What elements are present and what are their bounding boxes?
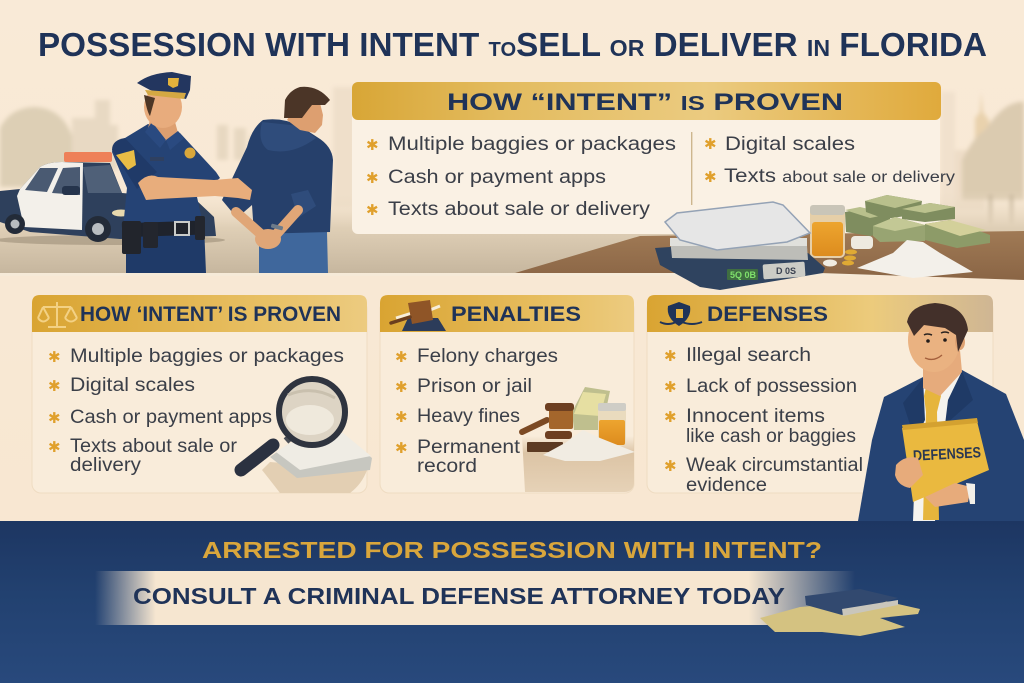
header bar <box>380 295 634 332</box>
panel: how intent is proven: Cash or payment apps <box>70 407 272 428</box>
panel: how intent is proven: Digital scales <box>70 375 195 396</box>
illustration: table with scale, bag, pills, cash and powder: D 0S <box>776 266 796 276</box>
panel: defenses: ✱ <box>664 457 677 475</box>
panel: how intent is proven (top): ✱ <box>366 169 379 187</box>
icon: police car <box>0 152 225 245</box>
panel: penalties: record <box>417 456 477 477</box>
icon: shield <box>660 302 702 326</box>
panel: how intent is proven (top): ✱ <box>366 201 379 219</box>
panel: defenses: evidence <box>686 475 767 496</box>
panel: defenses: Weak circumstantial <box>686 455 863 476</box>
panel: how intent is proven (top): ✱ <box>704 168 717 186</box>
panel: penalties: ✱ <box>395 439 408 457</box>
panel: how intent is proven: ✱ <box>48 377 61 395</box>
panel: how intent is proven (top): Digital scales <box>725 134 855 155</box>
illustration: police officer <box>112 72 252 273</box>
panel: how intent is proven: ✱ <box>48 438 61 456</box>
panel: defenses: Innocent items <box>686 406 825 427</box>
panel: how intent is proven: Texts about sale or <box>70 436 238 457</box>
cta strip <box>95 571 855 625</box>
panel: how intent is proven (top): ✱ <box>704 135 717 153</box>
panel: how intent is proven <box>32 295 372 493</box>
panel: penalties: Permanent <box>417 437 521 458</box>
panel: how intent is proven: ✱ <box>48 348 61 366</box>
folder label: DEFENSES <box>913 444 981 465</box>
illustration: suspect in handcuffs <box>222 87 333 273</box>
panel: how intent is proven (top): Texts about sale or delivery <box>388 199 651 220</box>
icon: magnifying glass over papers <box>241 379 372 493</box>
panel: penalties: PENALTIES <box>451 303 581 326</box>
icon: scales <box>38 302 77 327</box>
panel: how intent is proven: Multiple baggies or packages <box>70 346 344 367</box>
panel: defenses: like cash or baggies <box>686 426 856 447</box>
panel: how intent is proven (top): Multiple baggies or packages <box>388 134 676 155</box>
panel: how intent is proven (top): Cash or payment apps <box>388 167 606 188</box>
panel: how intent is proven (top): ✱ <box>366 136 379 154</box>
panel: how intent is proven: HOW ‘INTENT’ IS PROVEN <box>80 303 341 326</box>
panel: defenses: DEFENSES <box>707 303 828 326</box>
illustration: table with scale, bag, pills, cash and powder <box>515 195 1024 290</box>
panel: how intent is proven: delivery <box>70 455 142 476</box>
panel: penalties: Prison or jail <box>417 376 532 397</box>
illustration: table with scale, bag, pills, cash and powder: 5Q 0B <box>730 270 757 280</box>
panel: defenses: ✱ <box>664 408 677 426</box>
panel: how intent is proven (top): Texts about sale or delivery <box>724 166 955 187</box>
icon: gavel, cash, pills and powder <box>522 387 635 492</box>
title: POSSESSION WITH INTENT TOSELL OR DELIVER IN FLORIDA <box>38 26 987 63</box>
panel: penalties: ✱ <box>395 378 408 396</box>
header bar <box>32 295 367 332</box>
panel: penalties: ✱ <box>395 408 408 426</box>
panel: defenses: ✱ <box>664 378 677 396</box>
footer band <box>0 521 1024 683</box>
panel: penalties: ✱ <box>395 348 408 366</box>
panel: penalties: Heavy fines <box>417 406 520 427</box>
top panel header bar <box>352 82 941 120</box>
icon: gavel <box>391 300 446 331</box>
cta text: CONSULT A CRIMINAL DEFENSE ATTORNEY TODAY <box>133 583 785 609</box>
panel: how intent is proven (top): HOW “INTENT” IS PROVEN <box>447 89 843 116</box>
panel: defenses: Illegal search <box>686 345 811 366</box>
header bar <box>647 295 993 332</box>
panel: penalties: Felony charges <box>417 346 558 367</box>
panel: defenses <box>647 295 993 496</box>
panel: how intent is proven (top) <box>352 82 955 234</box>
panel: defenses: ✱ <box>664 347 677 365</box>
cta headline: ARRESTED FOR POSSESSION WITH INTENT? <box>202 537 822 563</box>
illustration: attorney holding defenses folder <box>858 303 1024 521</box>
panel: penalties <box>380 295 635 493</box>
panel: how intent is proven: ✱ <box>48 409 61 427</box>
icon: book and cash <box>760 589 920 636</box>
hero background scene <box>0 87 1024 276</box>
panel: defenses: Lack of possession <box>686 376 857 397</box>
